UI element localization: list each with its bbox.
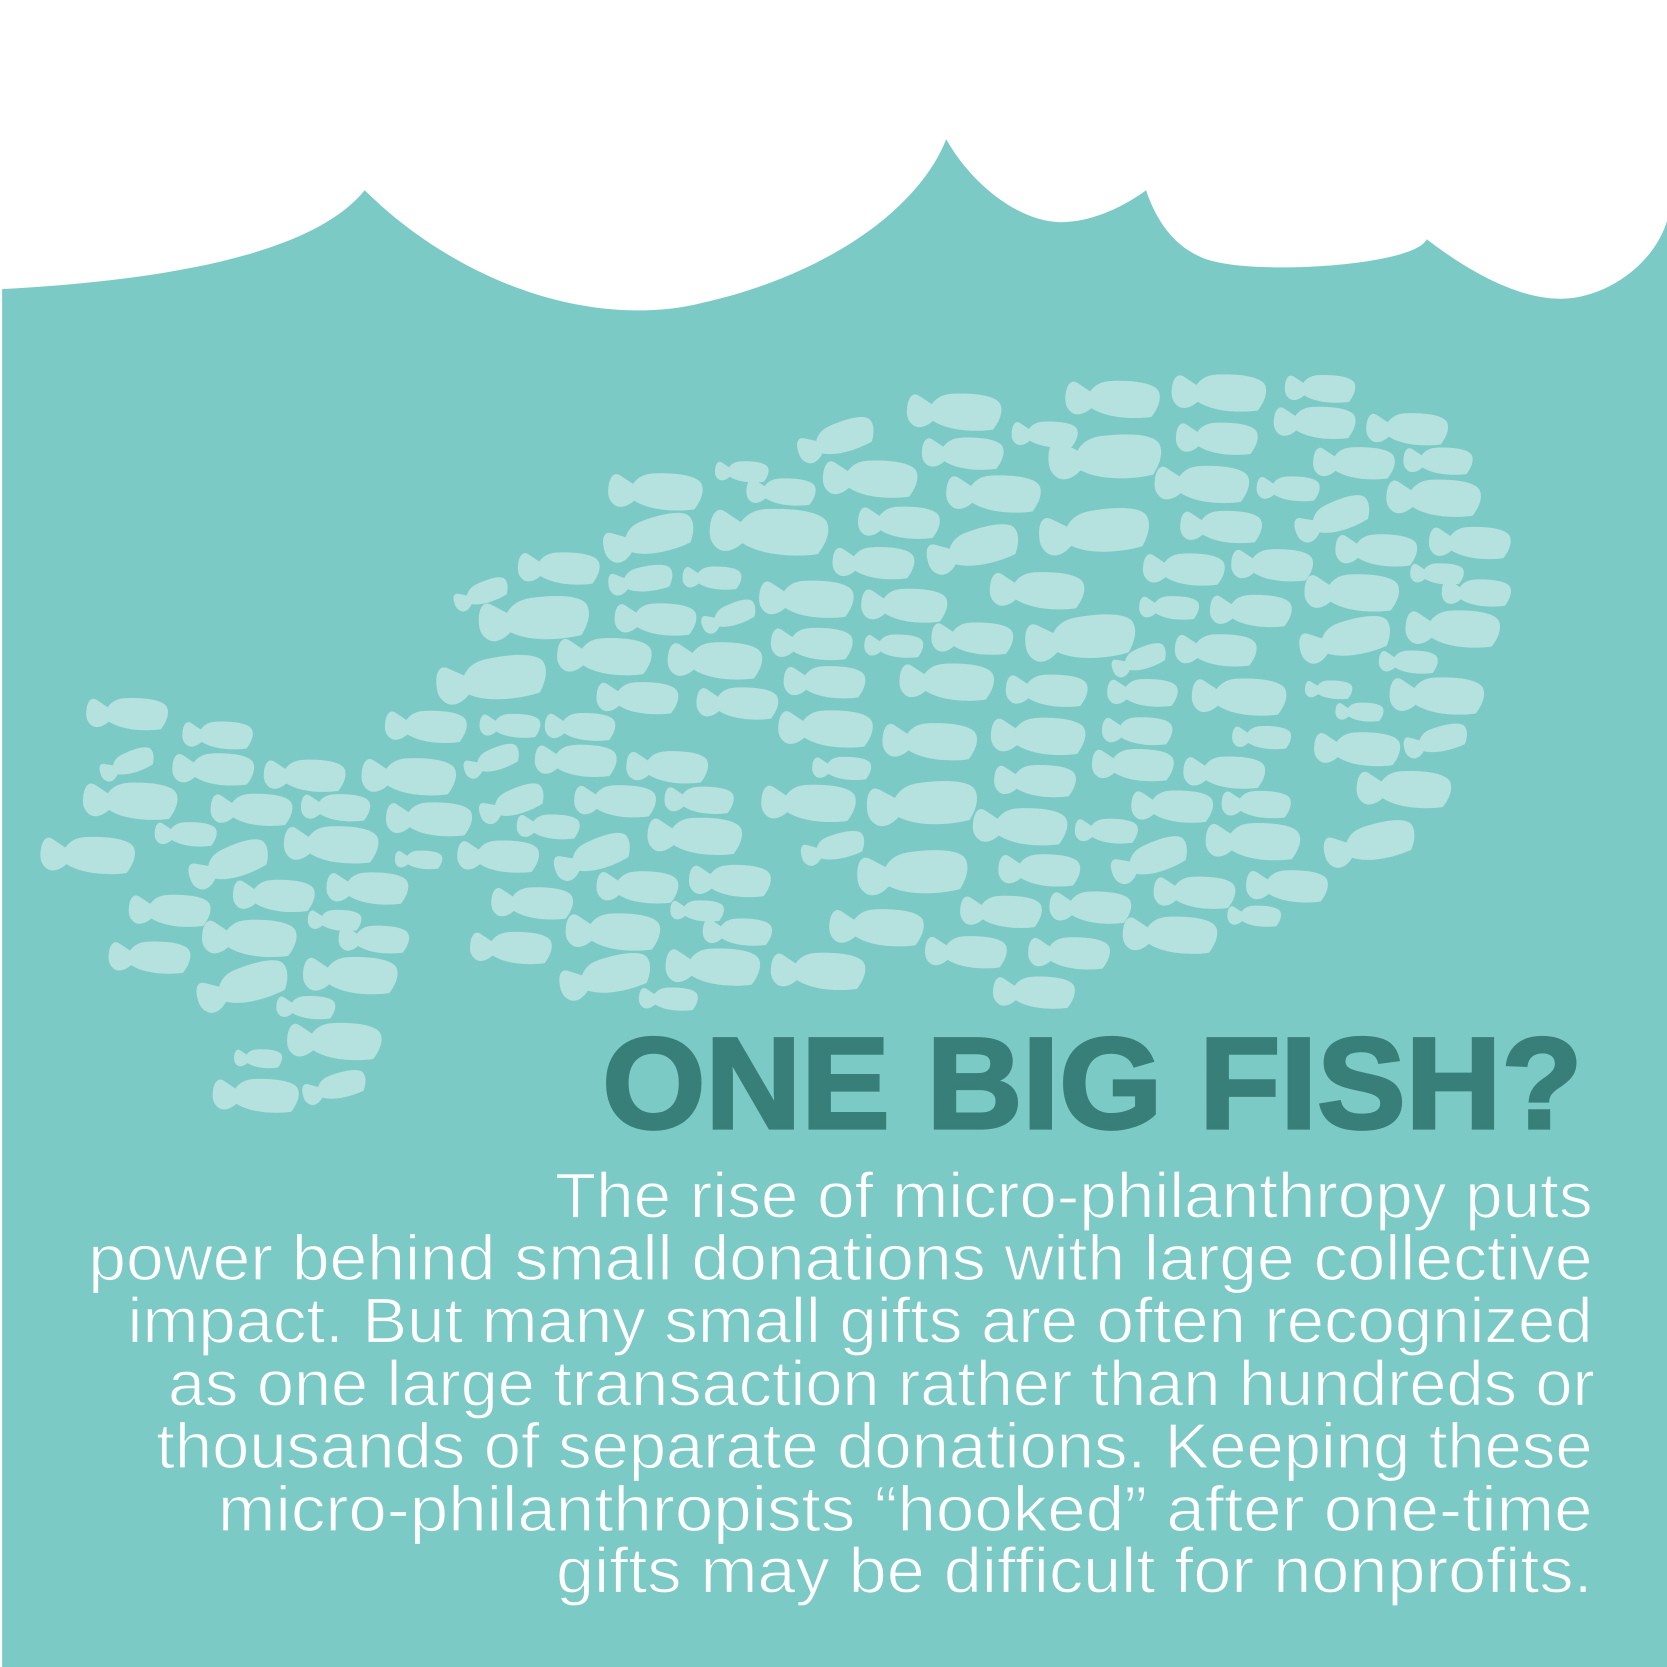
title: ONE BIG FISH? <box>602 1012 1582 1156</box>
fish cluster: middle of body <box>361 473 865 1011</box>
fish cluster: tail <box>40 698 442 1113</box>
body text block: impact. But many small gifts are often recognized <box>128 1285 1593 1357</box>
body text block: thousands of separate donations. Keeping these <box>156 1410 1593 1482</box>
school of small fish forming one big fish <box>40 374 1511 1113</box>
body text block: micro-philanthropists “hooked” after one-time <box>218 1473 1593 1545</box>
body text block: The rise of micro-philanthropy puts <box>555 1159 1593 1231</box>
fish cluster: head of body <box>710 374 1511 1009</box>
body text block <box>88 1159 1595 1607</box>
body text block: power behind small donations with large collective <box>88 1222 1593 1294</box>
body text block: gifts may be difficult for nonprofits. <box>556 1535 1593 1607</box>
body text block: as one large transaction rather than hundreds or <box>168 1347 1595 1419</box>
